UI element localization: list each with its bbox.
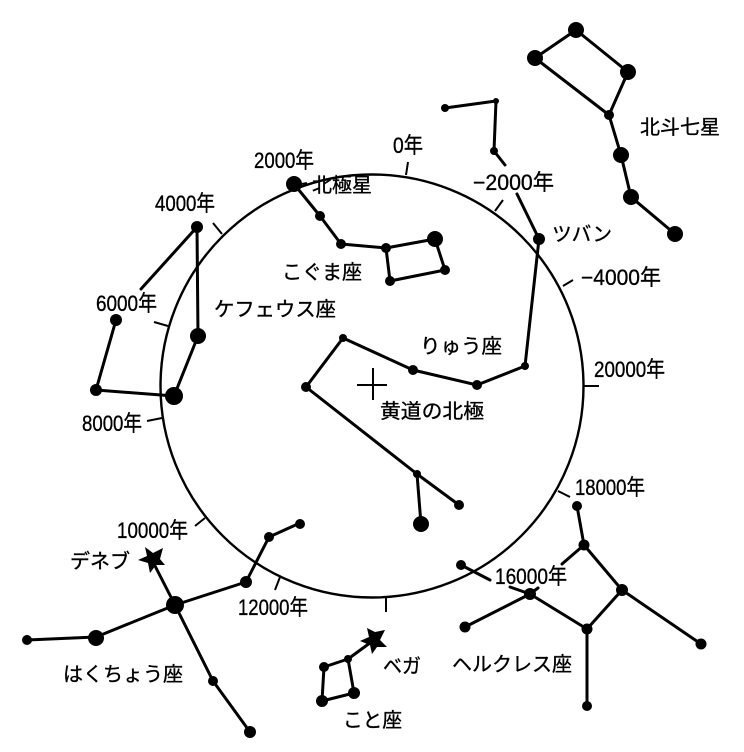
constellation and star name labels: 黄道の北極 [380, 400, 484, 423]
constellation and star name labels: こと座 [343, 709, 402, 732]
year labels: 18000年 [575, 475, 645, 500]
year labels: 10000年 [117, 518, 188, 543]
constellation: Big Dipper [527, 22, 683, 242]
year labels: −4000年 [581, 265, 661, 290]
constellation and star name labels: ベガ [383, 655, 421, 678]
constellation and star name labels: デネブ [70, 549, 130, 573]
constellation and star name labels: ヘルクレス座 [452, 653, 572, 676]
constellation: Cepheus [90, 221, 206, 405]
constellation: Cygnus [22, 519, 305, 738]
constellation and star name labels: はくちょう座 [63, 663, 183, 686]
constellation: Hercules [456, 501, 706, 711]
year labels [82, 133, 665, 620]
constellation: Draco [301, 98, 545, 532]
constellation: Ursa Minor [286, 176, 450, 286]
constellation and star name labels: こぐま座 [282, 261, 362, 284]
constellation and star name labels: ツバン [552, 224, 612, 246]
year labels: 4000年 [155, 191, 215, 216]
year labels: 8000年 [82, 411, 142, 436]
constellation and star name labels: ケフェウス座 [214, 298, 336, 321]
icon: Vega star [360, 628, 387, 654]
constellation and star name labels [63, 116, 720, 732]
constellation and star name labels: りゅう座 [420, 335, 502, 358]
year labels: 2000年 [254, 148, 314, 173]
constellation: Lyra [316, 628, 387, 707]
constellation and star name labels: 北斗七星 [640, 116, 720, 139]
precession circle with year ticks [147, 162, 599, 612]
year labels: 16000年 [495, 564, 567, 589]
constellation and star name labels: 北極星 [312, 174, 372, 197]
ecliptic north pole cross [357, 368, 387, 400]
year labels: −2000年 [473, 170, 554, 195]
year labels: 6000年 [96, 291, 157, 316]
year labels: 12000年 [238, 595, 308, 620]
icon: Deneb star [138, 547, 165, 573]
year labels: 0年 [393, 133, 423, 158]
year labels: 20000年 [594, 357, 665, 382]
